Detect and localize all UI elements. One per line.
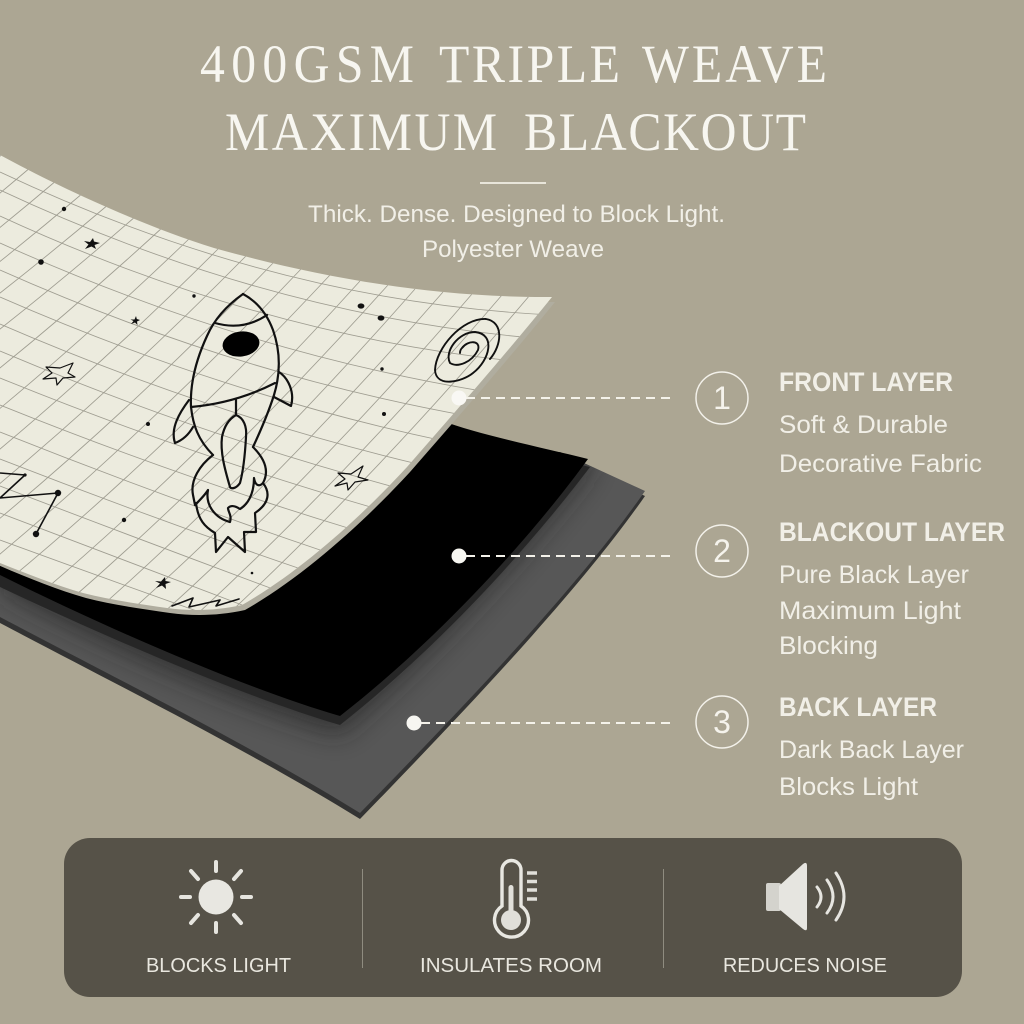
number badge 2: 2 <box>713 533 731 569</box>
constellation doodle <box>0 473 61 537</box>
callout line 3 <box>406 716 674 730</box>
blackout layer sheet <box>0 420 590 725</box>
title: WEAVE <box>642 35 827 94</box>
spiral doodle <box>435 319 499 382</box>
label: blocks light: BLOCKS LIGHT <box>146 955 291 977</box>
icon: sun <box>181 862 251 932</box>
fabric grid <box>0 152 553 631</box>
title <box>200 35 827 162</box>
title: MAXIMUM <box>225 103 497 162</box>
label: back layer <box>779 692 964 801</box>
label: back layer: Blocks Light <box>779 773 918 801</box>
label: back layer: BACK LAYER <box>779 692 937 722</box>
label: front layer: Soft & Durable <box>779 411 948 439</box>
label: front layer: FRONT LAYER <box>779 367 953 397</box>
front layer fabric <box>0 152 555 631</box>
number badge 3 <box>696 696 748 748</box>
label: blackout layer: Blocking <box>779 632 878 660</box>
title: BLACKOUT <box>524 103 806 162</box>
label: blackout layer: Pure Black Layer <box>779 561 969 589</box>
bottom zigzag doodle <box>172 598 239 607</box>
back layer sheet <box>0 440 645 819</box>
title: TRIPLE <box>439 35 620 94</box>
icon: thermometer <box>494 860 537 937</box>
number badge 3: 3 <box>713 704 731 740</box>
label: front layer <box>779 367 982 478</box>
icon: speaker <box>766 863 844 930</box>
label: insulates room: INSULATES ROOM <box>420 955 602 977</box>
number badge 1: 1 <box>713 380 731 416</box>
small filled stars <box>84 238 171 589</box>
label: back layer: Dark Back Layer <box>779 736 964 764</box>
subtitle <box>308 201 725 263</box>
callout line 2 <box>452 548 674 564</box>
label: blackout layer <box>779 517 1005 660</box>
rocket doodle <box>174 294 292 552</box>
panel: benefits <box>64 838 962 997</box>
dots <box>38 207 386 574</box>
subtitle: Thick. Dense. Designed to Block Light. <box>308 201 725 228</box>
number badge 1 <box>696 372 748 424</box>
subtitle: Polyester Weave <box>422 236 604 263</box>
label: blackout layer: BLACKOUT LAYER <box>779 517 1005 547</box>
label: front layer: Decorative Fabric <box>779 450 982 478</box>
title: 400GSM <box>200 35 414 94</box>
callout line 1 <box>452 390 674 406</box>
label: blackout layer: Maximum Light <box>779 597 961 625</box>
label: reduces noise: REDUCES NOISE <box>723 955 887 977</box>
outline stars <box>43 363 368 490</box>
number badge 2 <box>696 525 748 577</box>
